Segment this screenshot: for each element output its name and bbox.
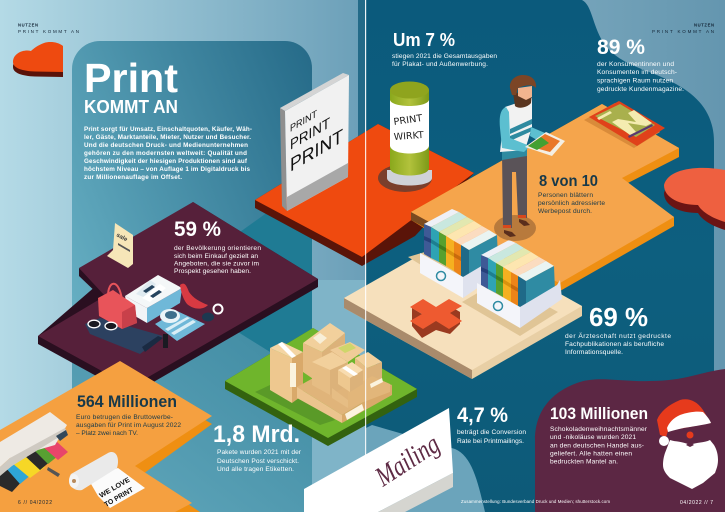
header right xyxy=(652,22,714,34)
intro text: Geschwindigkeit der hiesigen Produktionen sind auf xyxy=(84,158,248,165)
stat: 103 Millionen: bedruckten Mantel an. xyxy=(550,458,618,466)
stat: 59 %: Angeboten, die sie zuvor im xyxy=(174,260,260,268)
stat: 103 Millionen: geliefert. Alle hatten einen xyxy=(550,450,632,458)
intro text: ler, Gäste, Marktanteile, Mieter, Nutzer und Besucher. xyxy=(84,134,251,141)
stat: 59 %: Prospekt gesehen haben. xyxy=(174,268,251,275)
icon: red heart xyxy=(13,42,63,77)
stat: 103 Millionen xyxy=(550,404,648,466)
bracelet xyxy=(214,304,222,314)
icon: medical books right xyxy=(462,240,562,336)
icon: paper roll: TO PRINT xyxy=(104,486,135,509)
header left: PRINT KOMMT AN xyxy=(18,29,79,34)
platform: red xyxy=(255,124,474,266)
panel: dark right page xyxy=(366,0,714,512)
platform: green xyxy=(225,328,417,446)
tall box xyxy=(270,342,303,403)
header left: NUTZEN xyxy=(18,22,38,28)
lipstick xyxy=(163,334,168,348)
icon: paper roll: WE LOVE xyxy=(98,476,132,500)
stat: Um 7 %: Um 7 % xyxy=(393,30,455,50)
panel: purple santa xyxy=(535,369,725,512)
pallet xyxy=(297,366,392,423)
stat: Um 7 % xyxy=(392,30,497,68)
stat: 1,8 Mrd.: Und alle tragen Etiketten. xyxy=(217,466,294,473)
header right: NUTZEN xyxy=(694,22,714,28)
icon: mailing card xyxy=(304,408,453,512)
stat: 8 von 10: Personen blättern xyxy=(538,192,593,199)
handbag xyxy=(98,284,137,329)
shoes box xyxy=(125,275,182,323)
stat: 564 Millionen: – Platz zwei nach TV. xyxy=(76,430,138,437)
stat: 69 %: Informationsquelle. xyxy=(565,349,623,356)
stat: 8 von 10: 8 von 10 xyxy=(539,173,598,190)
flat box with label xyxy=(330,342,365,362)
stat: 89 %: Konsumenten im deutsch- xyxy=(597,69,677,76)
stat: 59 %: sich beim Einkauf gezielt an xyxy=(174,253,258,260)
icon: paper roll xyxy=(69,452,145,509)
icon: parcels xyxy=(270,323,392,423)
stat: 4,7 % xyxy=(457,404,526,445)
intro text xyxy=(84,126,252,181)
icon: magazine xyxy=(584,101,665,148)
header right: PRINT KOMMT AN xyxy=(652,29,714,34)
icon: santa xyxy=(657,399,718,489)
stat: 59 %: 59 % xyxy=(174,218,221,241)
stat: 564 Millionen xyxy=(76,392,181,437)
small box xyxy=(338,362,363,392)
stat: 564 Millionen: ausgaben für Print im August 2022 xyxy=(76,422,181,429)
platform: orange xyxy=(411,104,679,291)
shirt xyxy=(155,309,205,341)
back box xyxy=(303,323,345,385)
stat: 103 Millionen: Schokoladenweihnachtsmänner xyxy=(550,426,648,433)
intro text: Und die deutschen Druck- und Medienunternehmen xyxy=(84,142,248,149)
title: Print xyxy=(84,55,178,101)
stat: 69 %: der Ärzteschaft nutzt gedruckte xyxy=(565,332,671,340)
platform: purple xyxy=(38,202,318,395)
stat: 8 von 10: persönlich adressierte xyxy=(538,200,605,207)
stat: 89 %: gedruckte Kundenmagazine. xyxy=(597,86,684,93)
stat: 564 Millionen: Euro betrugen die Bruttowerbe- xyxy=(76,414,173,421)
icon: mailing card: Mailing xyxy=(369,429,446,493)
red heels xyxy=(180,284,208,309)
icon: print sign: PRINT xyxy=(290,108,317,135)
icon: advertising column: PRINT xyxy=(393,113,423,128)
page number left: 6 // 04/2022 xyxy=(18,500,52,506)
stat: 1,8 Mrd.: Deutschen Post verschickt. xyxy=(217,458,299,465)
sunglasses xyxy=(88,320,117,330)
stat: 564 Millionen: 564 Millionen xyxy=(77,392,177,411)
header left xyxy=(18,22,79,34)
watch xyxy=(202,312,214,322)
panel: intro card xyxy=(72,0,365,512)
icon: print sign: PRINT xyxy=(290,125,343,177)
stat: 89 %: 89 % xyxy=(597,36,645,59)
stat: 1,8 Mrd.: Pakete wurden 2021 mit der xyxy=(217,449,302,456)
stat: 59 % xyxy=(174,218,261,275)
middle box xyxy=(312,352,348,395)
intro text: zur Millionenauflage im Offset. xyxy=(84,174,182,181)
stat: 1,8 Mrd. xyxy=(213,421,302,473)
icon: sale tag: sale xyxy=(115,232,129,244)
source line: Zusammenstellung: Bundesverband Druck und Medien; shutterstock.com xyxy=(461,499,610,504)
intro text: Print sorgt für Umsatz, Einschaltquoten, Käufer, Wäh- xyxy=(84,126,252,133)
stat: 59 %: der Bevölkerung orientieren xyxy=(174,245,261,252)
stat: Um 7 %: stiegen 2021 die Gesamtausgaben xyxy=(392,53,497,60)
icon: fashion items xyxy=(85,275,222,354)
stat: 4,7 %: 4,7 % xyxy=(457,404,508,427)
stat: 1,8 Mrd.: 1,8 Mrd. xyxy=(213,421,300,448)
icon: man reading xyxy=(494,75,565,241)
icon: red cross xyxy=(410,299,462,338)
stat: 8 von 10 xyxy=(538,173,605,215)
intro text: gehören zu den modernsten weltweit: Qualität und xyxy=(84,150,247,157)
stat: 89 %: sprachigen Raum nutzen xyxy=(597,78,673,84)
icon: advertising column: WIRKT xyxy=(393,130,424,143)
stat: 69 %: Fachpublikationen als berufliche xyxy=(565,341,664,348)
page number right: 04/2022 // 7 xyxy=(680,500,713,506)
stat: 69 % xyxy=(565,302,671,356)
stat: 103 Millionen: an den deutschen Handel aus- xyxy=(550,442,644,450)
stat: 69 %: 69 % xyxy=(589,302,648,332)
icon: red cloud xyxy=(664,168,725,230)
light blob bottom xyxy=(366,425,485,512)
icon: medical books left xyxy=(408,209,505,298)
intro text: höchstem Niveau – von Auflage 1 im Digitaldruck bis xyxy=(84,166,250,173)
right back box xyxy=(355,352,382,386)
title: KOMMT AN xyxy=(84,97,178,117)
lower right box xyxy=(332,376,390,408)
stat: 8 von 10: Werbepost durch. xyxy=(538,208,592,215)
stat: 103 Millionen: und -nikoläuse wurden 2021 xyxy=(550,434,636,441)
icon: print sign xyxy=(280,73,349,211)
icon: sale tag xyxy=(107,223,133,268)
platform: cream xyxy=(344,235,582,379)
icon: print sign: PRINT xyxy=(290,115,330,154)
stat: 4,7 %: beträgt die Conversion xyxy=(457,429,526,436)
stat: 89 %: der Konsumentinnen und xyxy=(597,61,674,68)
icon: large format printer xyxy=(0,412,70,512)
platform: orange lower left xyxy=(0,361,212,512)
stat: Um 7 %: für Plakat- und Außenwerbung. xyxy=(392,61,488,68)
stat: 89 % xyxy=(597,36,684,93)
jeans xyxy=(85,318,163,354)
stat: 4,7 %: Rate bei Printmailings. xyxy=(457,438,524,445)
stat: 103 Millionen: 103 Millionen xyxy=(550,404,648,423)
icon: advertising column xyxy=(378,82,432,192)
